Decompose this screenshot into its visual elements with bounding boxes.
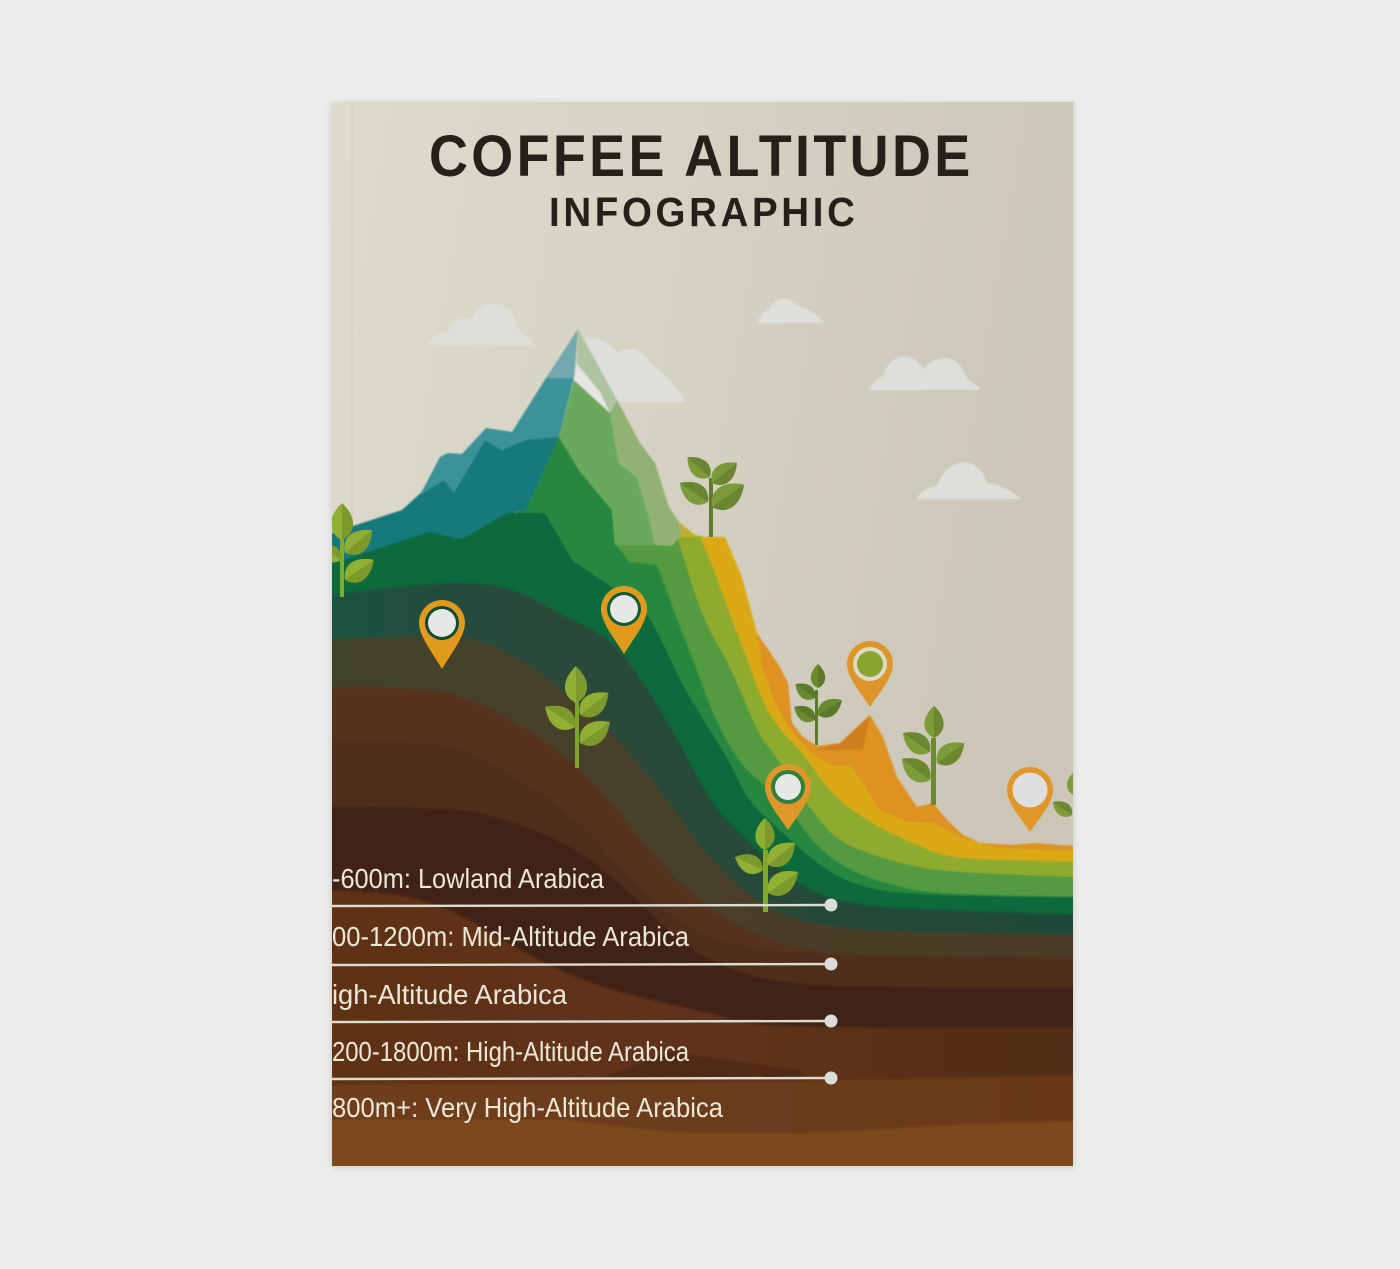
mountain and slope layers	[332, 329, 1073, 916]
plant: on the ridge	[680, 457, 744, 537]
soil band 5	[332, 808, 1073, 1028]
mid green layer	[517, 436, 1073, 898]
map pin 3	[847, 641, 893, 707]
map pin 5	[1007, 767, 1053, 832]
cloud 3	[757, 298, 825, 323]
label 5: 800m+: Very High-Altitude Arabica	[332, 1092, 723, 1123]
plant: beside terrace	[790, 664, 846, 745]
dark teal face	[332, 436, 559, 565]
poster cover	[300, 102, 1100, 1190]
label 4: 200-1800m: High-Altitude Arabica	[332, 1036, 689, 1067]
pale sage upper ridge	[577, 329, 617, 413]
cloud 1	[427, 304, 534, 345]
altitude labels	[332, 863, 723, 1123]
leader line 3	[332, 1014, 838, 1028]
plant: right hillside	[896, 706, 970, 805]
soil band 4	[300, 742, 1100, 1190]
leader line 2	[332, 958, 838, 970]
dark green layer	[332, 511, 1073, 915]
yellow-olive cap	[679, 522, 706, 538]
cloud 2	[580, 338, 686, 402]
cloud 5	[917, 462, 1021, 499]
leader line 1	[332, 898, 838, 912]
pale sage lower ridge	[610, 400, 682, 546]
map pin 4	[765, 764, 811, 830]
light green layer	[616, 540, 1073, 898]
orange soil layer	[756, 632, 1073, 852]
mountain peak faces	[332, 329, 683, 565]
orange ridge shadow	[815, 715, 870, 750]
soil band 1	[332, 582, 1073, 936]
subtitle: INFOGRAPHIC	[549, 190, 855, 235]
leader line 4	[332, 1072, 838, 1084]
book shadow	[331, 103, 1074, 1168]
mid teal face	[420, 378, 574, 495]
soil band 6	[332, 890, 1073, 1086]
olive layer	[676, 536, 1073, 878]
soil layers	[332, 582, 1073, 1166]
soil band 3	[332, 686, 837, 954]
plant: left edge	[332, 503, 374, 597]
title: COFFEE ALTITUDE	[429, 123, 970, 188]
snow patch	[574, 364, 610, 413]
soil band 2	[332, 635, 1073, 958]
green mountain face	[559, 380, 655, 545]
soil band 7	[332, 1075, 1073, 1132]
soil band 9	[332, 1120, 1073, 1166]
clouds	[427, 298, 1021, 499]
sky background	[332, 102, 1073, 846]
label 3: igh-Altitude Arabica	[332, 979, 567, 1010]
soil shadow	[600, 1052, 805, 1078]
map pin 2	[601, 586, 647, 654]
leader lines	[332, 898, 838, 1084]
plant: mid soil	[539, 666, 616, 768]
cloud 4	[868, 357, 981, 390]
plant: right edge	[1049, 772, 1081, 821]
peak tip	[546, 329, 578, 378]
spine crease	[351, 102, 353, 602]
label 2: 00-1200m: Mid-Altitude Arabica	[332, 921, 689, 952]
map pin 1	[419, 600, 465, 669]
plant: lower slope	[731, 818, 804, 912]
yellow layer	[700, 536, 1073, 862]
label 1: -600m: Lowland Arabica	[332, 863, 604, 894]
